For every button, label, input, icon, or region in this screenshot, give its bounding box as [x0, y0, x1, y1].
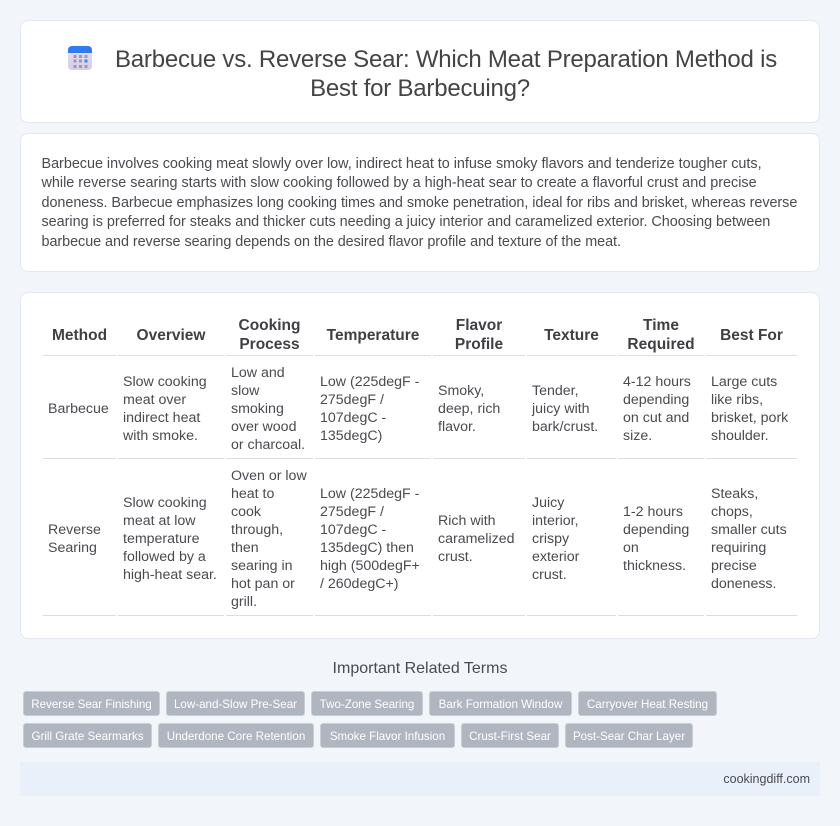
comparison table: Smoky,: [438, 383, 484, 399]
text block: introduction: doneness. Barbecue emphasizes long cooking times and smoke penetration, ideal for ribs and brisket, whereas reverse: [42, 194, 797, 210]
comparison table: meat over: [123, 392, 186, 408]
comparison table: Required: [627, 336, 695, 353]
comparison table: meat at low: [123, 513, 196, 529]
comparison table: shoulder.: [711, 428, 769, 444]
comparison table: searing in: [231, 558, 293, 574]
comparison table: heat to: [231, 486, 274, 502]
tag: Grill Grate Searmarks: [31, 730, 144, 743]
comparison table: 275degF /: [320, 504, 384, 520]
tag: [23, 691, 160, 716]
comparison table: followed by a: [123, 549, 206, 565]
comparison table: hot pan or: [231, 576, 295, 592]
comparison table: deep, rich: [438, 401, 500, 417]
comparison table: Cooking: [238, 317, 300, 334]
comparison table: Low (225degF -: [320, 374, 419, 390]
comparison table: Slow cooking: [123, 374, 207, 390]
comparison table: exterior: [532, 549, 579, 565]
comparison table: [43, 317, 797, 616]
comparison table: indirect heat: [123, 410, 200, 426]
tag: Reverse Sear Finishing: [31, 698, 152, 711]
tag: Bark Formation Window: [439, 698, 562, 711]
text block: introduction: barbecue and reverse searing depends on the desired flavor profile and texture of the meat.: [42, 234, 621, 250]
comparison table: juicy with: [532, 401, 590, 417]
text block: introduction: searing is preferred for steaks and thicker cuts needing a juicy interior and caramelized exterior. Choosing between: [42, 214, 770, 230]
comparison table: through,: [231, 522, 283, 538]
comparison table: 135degC) then: [320, 540, 414, 556]
comparison table: 4-12 hours: [623, 374, 691, 390]
tag: [461, 723, 559, 748]
comparison table: temperature: [123, 531, 200, 547]
comparison table: on cut and: [623, 410, 689, 426]
panel: comparison table: [20, 292, 820, 639]
comparison table: Rich with: [438, 513, 496, 529]
text block: introduction: Barbecue involves cooking meat slowly over low, indirect heat to infuse smoky flavors and tenderize tougher cuts,: [42, 156, 762, 172]
comparison table: Profile: [455, 336, 503, 353]
icon: calendar: [68, 46, 92, 70]
comparison table: cook: [231, 504, 261, 520]
panel: title header: [20, 20, 820, 123]
footer source text: cookingdiff.com: [723, 772, 810, 786]
comparison table: Process: [239, 336, 300, 353]
comparison table: depending: [623, 522, 689, 538]
comparison table: Searing: [48, 540, 97, 556]
comparison table: then: [231, 540, 259, 556]
tag: Low-and-Slow Pre-Sear: [174, 698, 297, 711]
comparison table: Steaks,: [711, 486, 758, 502]
tag: Crust-First Sear: [469, 730, 551, 743]
comparison table: on: [623, 540, 639, 556]
tag: Carryover Heat Resting: [587, 698, 708, 711]
comparison table: grill.: [231, 594, 257, 610]
comparison table: Best For: [720, 326, 783, 344]
comparison table: Texture: [544, 326, 599, 344]
comparison table: crispy: [532, 531, 569, 547]
comparison table: Temperature: [327, 326, 419, 344]
comparison table: depending: [623, 392, 689, 408]
comparison table: size.: [623, 428, 652, 444]
title: Best for Barbecuing?: [310, 75, 530, 102]
comparison table: brisket, pork: [711, 410, 788, 426]
panel: introduction: [20, 133, 820, 272]
related term tags: [23, 691, 717, 748]
comparison table: Reverse: [48, 522, 101, 538]
tag: Smoke Flavor Infusion: [330, 730, 445, 743]
comparison table: Low and: [231, 365, 285, 381]
comparison table: 135degC): [320, 428, 382, 444]
comparison table: interior,: [532, 513, 579, 529]
comparison table: 107degC -: [320, 522, 386, 538]
comparison table: Time: [643, 317, 679, 334]
comparison table: smaller cuts: [711, 522, 787, 538]
comparison table: Low (225degF -: [320, 486, 419, 502]
comparison table: chops,: [711, 504, 753, 520]
footer: [20, 762, 820, 796]
comparison table: Large cuts: [711, 374, 777, 390]
comparison table: 275degF /: [320, 392, 384, 408]
comparison table: thickness.: [623, 558, 686, 574]
comparison table: precise: [711, 558, 757, 574]
comparison table: doneness.: [711, 576, 776, 592]
tag: [158, 723, 314, 748]
comparison table: requiring: [711, 540, 766, 556]
comparison table: Oven or low: [231, 468, 307, 484]
comparison table: flavor.: [438, 419, 476, 435]
comparison table: high (500degF+: [320, 558, 420, 574]
comparison table: Tender,: [532, 383, 579, 399]
comparison table: slow: [231, 383, 259, 399]
comparison table: / 260degC+): [320, 576, 398, 592]
comparison table: Flavor: [456, 317, 502, 334]
comparison table: or charcoal.: [231, 437, 305, 453]
comparison table: over wood: [231, 419, 296, 435]
tag: Two-Zone Searing: [320, 698, 414, 711]
comparison table: like ribs,: [711, 392, 763, 408]
comparison table: Barbecue: [48, 401, 109, 417]
tag: [578, 691, 717, 716]
title: Barbecue vs. Reverse Sear: Which Meat Preparation Method is: [115, 46, 777, 73]
tag: [311, 691, 423, 716]
comparison table: bark/crust.: [532, 419, 598, 435]
comparison table: caramelized: [438, 531, 514, 547]
comparison table: with smoke.: [123, 428, 198, 444]
tag: Post-Sear Char Layer: [573, 730, 685, 743]
title: [115, 46, 777, 102]
heading: related terms: Important Related Terms: [333, 660, 507, 677]
text block: introduction: [42, 156, 797, 250]
tag: [166, 691, 305, 716]
comparison table: Method: [52, 326, 107, 344]
comparison table: Juicy: [532, 495, 564, 511]
tag: [23, 723, 152, 748]
comparison table: smoking: [231, 401, 284, 417]
tag: [565, 723, 693, 748]
comparison table: crust.: [438, 549, 473, 565]
comparison table: 1-2 hours: [623, 504, 683, 520]
tag: [429, 691, 572, 716]
comparison table: 107degC -: [320, 410, 386, 426]
comparison table: high-heat sear.: [123, 567, 217, 583]
comparison table: Slow cooking: [123, 495, 207, 511]
text block: introduction: while reverse searing starts with slow cooking followed by a high-heat sear to create a flavorful crust and precise: [42, 175, 757, 191]
comparison table: Overview: [137, 326, 205, 344]
tag: Underdone Core Retention: [167, 730, 305, 743]
tag: [320, 723, 455, 748]
comparison table: crust.: [532, 567, 567, 583]
